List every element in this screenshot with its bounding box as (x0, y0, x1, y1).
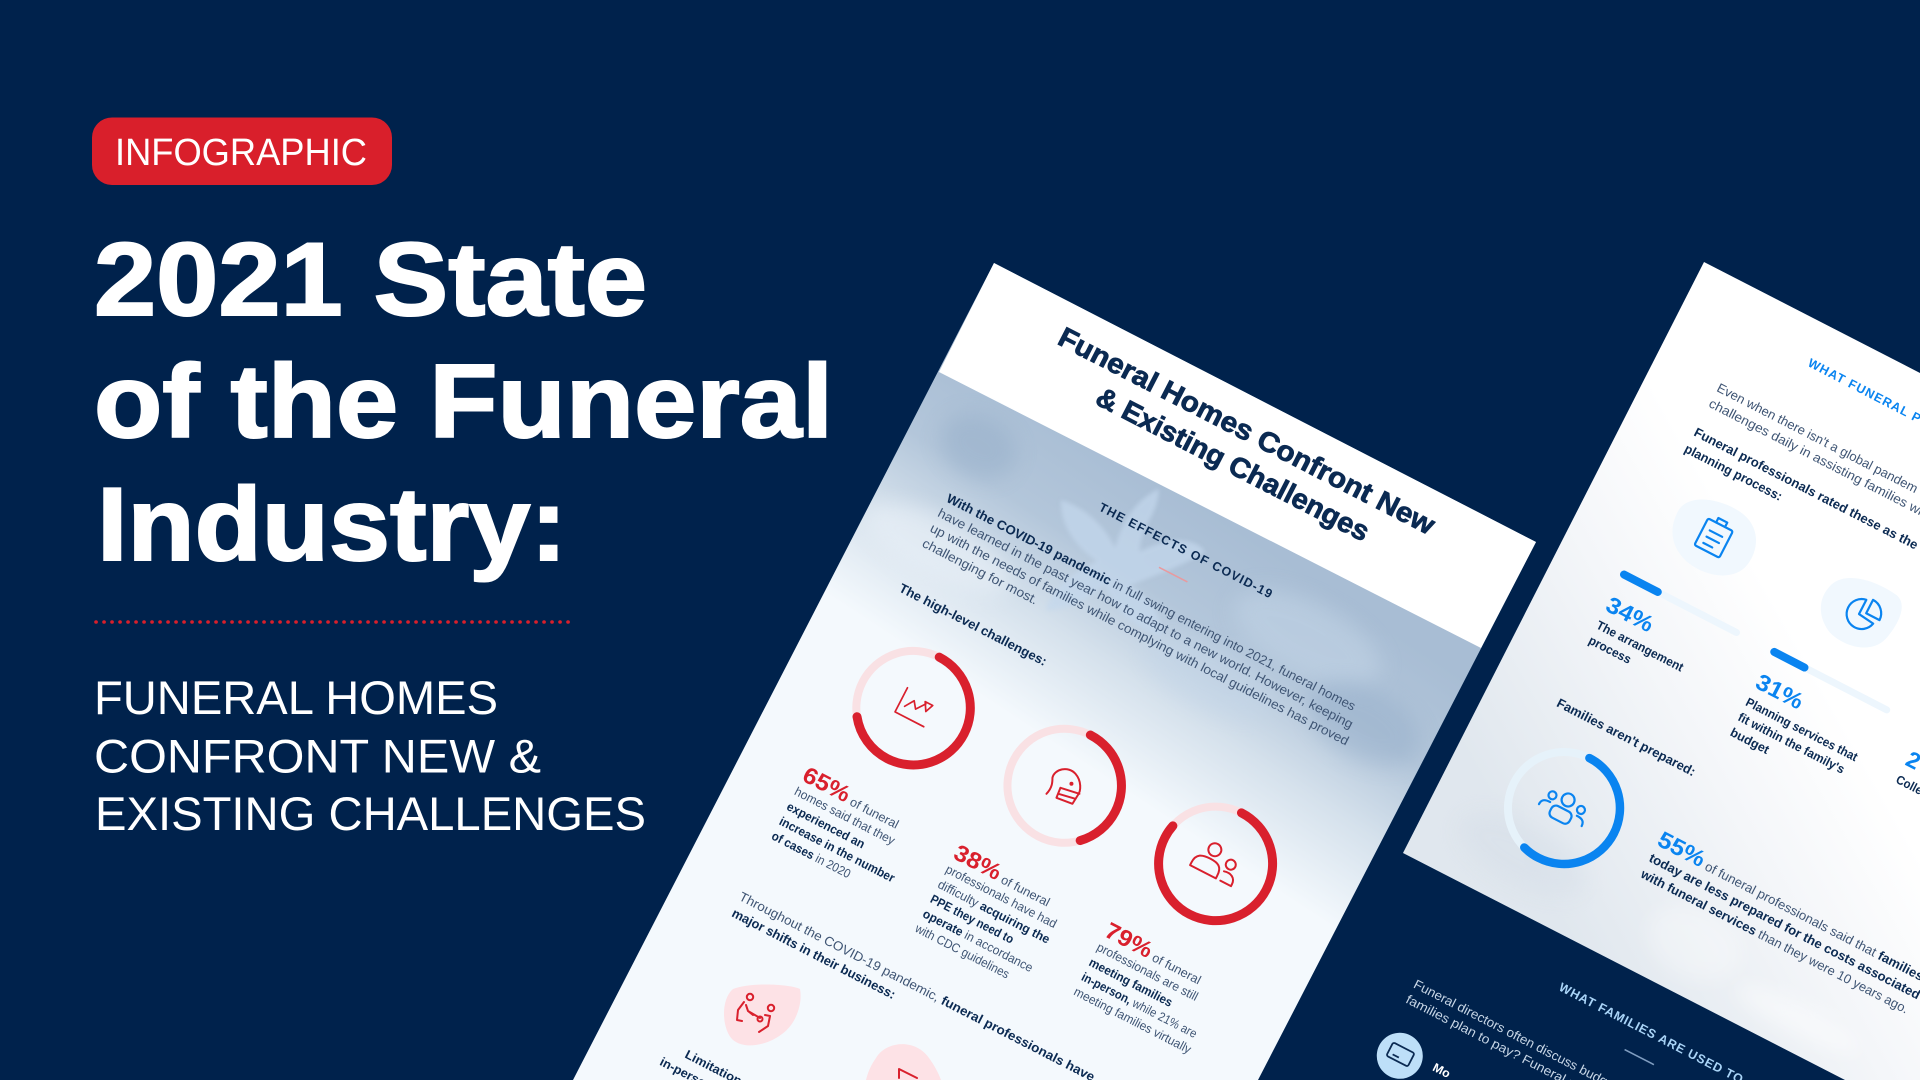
stat text: 38%: operate in accordance (920, 907, 1035, 975)
stat text: 55%: of funeral professionals said that families (1703, 859, 1920, 984)
badge: infographic (92, 118, 392, 185)
subtitle: CONFRONT NEW & (94, 730, 541, 784)
stat text: 65%: of cases in 2020 (769, 829, 853, 881)
stat text: 38%: 38% (950, 839, 1006, 885)
stat: 34%: 34% (1602, 591, 1658, 637)
intro text (1682, 380, 1920, 569)
stat text: 79%: in-person, while 21% are (1079, 970, 1199, 1041)
stat text: 38%: difficulty acquiring the (936, 877, 1052, 947)
intro text: challenges daily in assisting families with (1706, 396, 1920, 523)
dotted divider (96, 620, 571, 624)
icon: two people (1190, 837, 1245, 886)
panel: tilted page 2, what funeral professionals say (1342, 262, 1920, 1080)
business shifts intro text: major shifts in their business: (729, 905, 898, 1002)
stat text: 79%: professionals are still (1094, 940, 1200, 1004)
main title: Industry: (97, 467, 567, 583)
section label: WHAT FUNERAL P (1806, 356, 1920, 426)
stat text: 38% (912, 839, 1072, 991)
donut chart: 65% (837, 631, 990, 785)
stat text: 55%: 55% (1654, 826, 1710, 872)
stat text: 65%: 65% (799, 761, 855, 807)
intro text: challenging for most. (920, 535, 1041, 607)
stat text: 65%: increase in the number (777, 814, 897, 885)
stat: 34% (1586, 591, 1700, 690)
main title: 2021 State (94, 222, 647, 338)
stat: 31%: fit within the family's (1736, 710, 1847, 777)
stat text: 65%: experienced an (784, 800, 867, 851)
stat text: 79%: of funeral (1150, 951, 1203, 987)
stat: 31% (1728, 668, 1874, 795)
donut chart: 55% (1489, 733, 1639, 883)
stat: partial third item (1894, 746, 1920, 798)
main title: of the Funeral (94, 344, 833, 460)
subheading: families aren't prepared: Families aren't prepared: (1554, 695, 1698, 779)
progress bar: 34% (1619, 569, 1741, 638)
subtitle (94, 672, 646, 841)
stat text: 55%: today are less prepared for the costs associated (1647, 850, 1920, 1002)
stat: 31%: budget (1728, 725, 1772, 757)
intro text: Funeral professionals rated these as the (1692, 425, 1920, 552)
stat text: 38%: PPE they need to (928, 892, 1016, 947)
icon: rising chart (895, 688, 936, 727)
subheading: high-level challenges: The high-level challenges: (897, 580, 1049, 669)
stat: 31%: Planning services that (1743, 695, 1861, 765)
section label: effects of covid-19: THE EFFECTS OF COVID-19 (1097, 500, 1275, 601)
stat text: 38%: of funeral (999, 873, 1052, 909)
icon: clipboard blob (1659, 486, 1768, 589)
stat text: 79%: 79% (1101, 917, 1157, 963)
icon: family group (1536, 783, 1592, 831)
business shifts intro text: Throughout the COVID-19 pandemic, funeral professionals have (737, 889, 1097, 1080)
icon: pie chart blob (1809, 564, 1909, 660)
stat text: 79% (1072, 917, 1229, 1057)
badge: infographic: INFOGRAPHIC (115, 132, 367, 174)
main title (94, 222, 833, 583)
heading: Funeral Homes Confront New (1053, 321, 1440, 541)
stat text: 65%: of funeral (848, 795, 901, 832)
stat text: 55%: with funeral services than they were 10 years ago. (1638, 866, 1911, 1016)
icon: pink blob with people (724, 984, 801, 1045)
subtitle: FUNERAL HOMES (94, 672, 498, 725)
heading: & Existing Challenges (1091, 381, 1375, 547)
progress bar: 31% (1769, 647, 1892, 715)
icon: laptop circle (1369, 1025, 1431, 1080)
stat: 31%: 31% (1752, 668, 1808, 714)
subtitle: EXISTING CHALLENGES (95, 788, 646, 841)
icon: face mask (1046, 769, 1080, 804)
stat text: 38%: with CDC guidelines (912, 921, 1012, 981)
intro text: planning process: (1682, 441, 1785, 504)
panel: tilted page 1, funeral homes confront challenges (573, 263, 1536, 1080)
intro text: With the COVID-19 pandemic in full swing entering into 2021, funeral homes (944, 491, 1359, 714)
intro text: up with the needs of families while complying with local guidelines has proved (928, 520, 1352, 748)
donut chart: 79% (1139, 787, 1292, 940)
business shift captions (657, 1039, 744, 1080)
intro text: have learned in the past year how to adapt to a new world. However, keeping (935, 505, 1356, 731)
stat text: 79%: meeting families virtually (1072, 985, 1194, 1057)
icon: pink blob with document (866, 1044, 941, 1080)
stat: 34%: process (1586, 633, 1634, 667)
intro text: Even when there isn't a global pandem (1715, 380, 1920, 496)
stat text: 65% (769, 761, 924, 900)
stat text: 65%: homes said that they (792, 784, 898, 848)
donut chart: 38% (988, 709, 1141, 863)
stat: 34%: The arrangement (1594, 618, 1686, 675)
stat text: 79%: meeting families (1087, 955, 1175, 1010)
stat text: 38%: professionals have had (943, 862, 1059, 931)
